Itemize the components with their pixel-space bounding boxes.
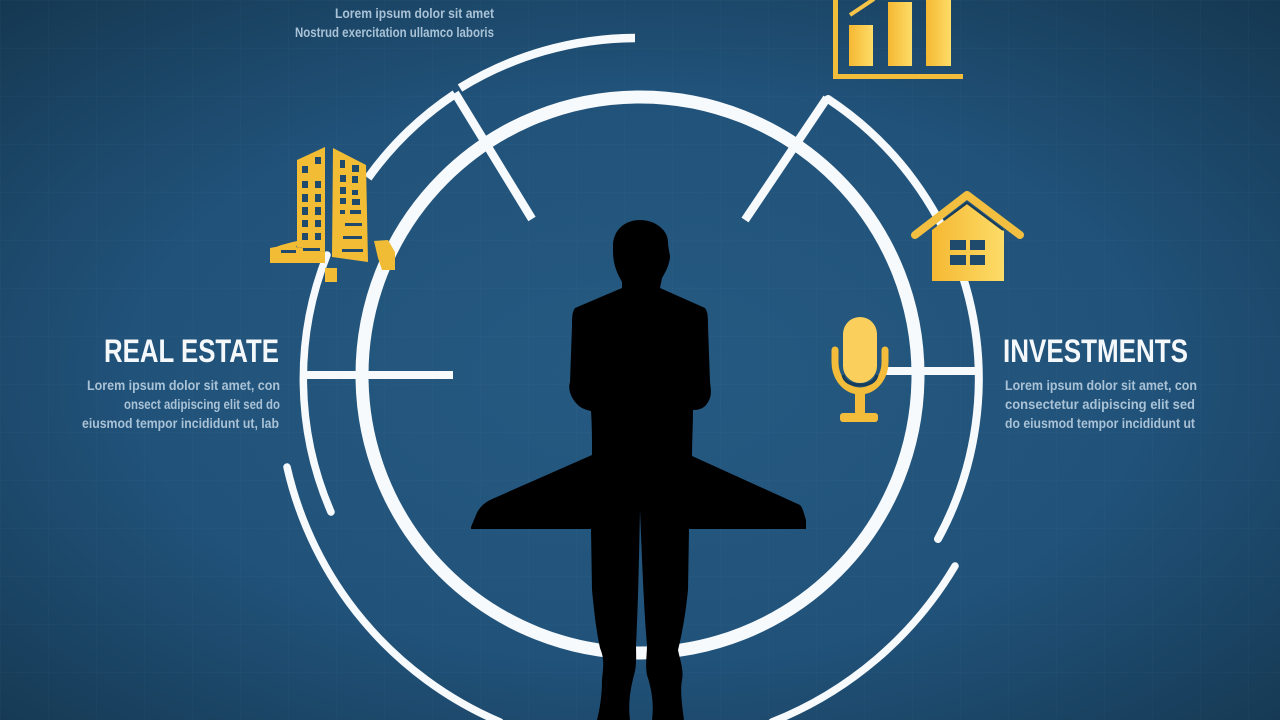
text: real estate description: eiusmod tempor incididunt ut, lab (82, 415, 279, 431)
lower sweeping arc: right part (772, 566, 955, 720)
concentric ring diagram (287, 38, 979, 720)
text: top caption: Lorem ipsum dolor sit amet (335, 5, 494, 21)
text: top caption (295, 5, 494, 40)
icon: house (915, 195, 1020, 281)
text: real estate description (82, 377, 280, 431)
text: investments description: consectetur adipiscing elit sed (1005, 396, 1195, 412)
heading: real estate: REAL ESTATE (104, 333, 279, 369)
spoke: upper right (745, 98, 827, 220)
heading: investments: INVESTMENTS (1003, 333, 1188, 369)
text: investments description (1005, 377, 1197, 431)
icon: bar chart (836, 0, 963, 76)
spoke: left (305, 371, 453, 379)
spoke: right (885, 367, 975, 375)
text: real estate description: onsect adipiscing elit sed do (124, 396, 280, 412)
inner ring (362, 97, 918, 653)
text: top caption: Nostrud exercitation ullamco laboris (295, 24, 494, 40)
lower sweeping arc: left part (287, 467, 500, 720)
outer ring: right arc (828, 99, 979, 539)
text: investments description: do eiusmod tempor incididunt ut (1005, 415, 1195, 431)
text: investments description: Lorem ipsum dolor sit amet, con (1005, 377, 1197, 393)
icon: microphone (835, 317, 885, 422)
outer ring: top arc (460, 38, 635, 88)
outer ring: upper left arc (368, 94, 455, 178)
outer ring: left arc (303, 255, 331, 512)
person silhouette (471, 220, 806, 720)
icon: office buildings (270, 147, 395, 282)
text: real estate description: Lorem ipsum dolor sit amet, con (87, 377, 280, 393)
spoke: upper left (455, 93, 532, 219)
